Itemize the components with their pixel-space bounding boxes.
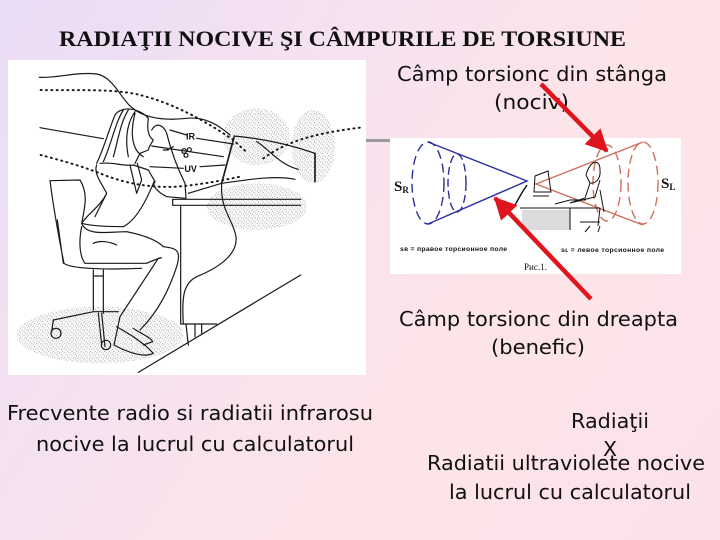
text: radio and infrared caption bbox=[7, 401, 373, 456]
text: ultraviolet caption: la lucrul cu calculatorul bbox=[449, 480, 691, 504]
hair and face bbox=[97, 109, 153, 163]
labels on rays: IR bbox=[186, 131, 195, 141]
text: X-ray label: Radiaţii bbox=[571, 409, 649, 433]
desk bbox=[138, 183, 301, 372]
title: RADIAŢII NOCIVE ŞI CÂMPURILE DE TORSIUNE bbox=[59, 25, 626, 51]
text: ultraviolet caption bbox=[427, 451, 705, 504]
radiation lines bbox=[39, 74, 360, 187]
text: right torsion field label bbox=[399, 307, 678, 359]
text: left torsion field label: Câmp torsionc din stânga bbox=[397, 62, 667, 86]
text: right torsion field label: Câmp torsionc din dreapta bbox=[399, 307, 678, 331]
text: radio and infrared caption: Frecvente radio si radiatii infrarosu bbox=[7, 401, 373, 425]
right field cone bbox=[394, 142, 527, 224]
left field cone: L bbox=[669, 182, 675, 192]
chair bbox=[50, 180, 142, 269]
right field cone: R bbox=[402, 185, 409, 195]
text: X-ray label bbox=[571, 409, 649, 461]
monitor bbox=[222, 137, 315, 183]
text: X-ray label: X bbox=[603, 437, 617, 461]
text: right torsion field label: (benefic) bbox=[491, 335, 585, 359]
left field cone bbox=[536, 142, 675, 225]
text: left torsion field label bbox=[397, 62, 667, 114]
right field cone: S bbox=[394, 179, 402, 195]
decorative connector bbox=[366, 139, 390, 142]
text: ultraviolet caption: Radiatii ultraviolete nocive bbox=[427, 451, 705, 475]
panel: person at computer illustration bbox=[8, 60, 366, 375]
text: radio and infrared caption: nocive la lucrul cu calculatorul bbox=[36, 432, 354, 456]
panel: person at computer illustration: UV bbox=[184, 164, 197, 174]
left field cone: S bbox=[661, 176, 669, 192]
computer operator bbox=[515, 162, 604, 232]
panel: torsion field diagram: Рис.1. bbox=[524, 262, 547, 272]
text: left torsion field label: (nociv) bbox=[494, 90, 569, 114]
panel: torsion field diagram: sʟ = левое торсионное поле bbox=[561, 247, 664, 254]
torso and arm bbox=[82, 163, 163, 247]
arrow: to left field bbox=[541, 84, 607, 151]
legs bbox=[80, 227, 179, 330]
stippled radiation areas bbox=[17, 108, 335, 363]
feet bbox=[114, 317, 153, 355]
panel: torsion field diagram bbox=[390, 138, 681, 274]
arrow: to right field bbox=[495, 198, 591, 299]
diagram legend: sʀ = правое торсионное поле bbox=[400, 246, 507, 253]
